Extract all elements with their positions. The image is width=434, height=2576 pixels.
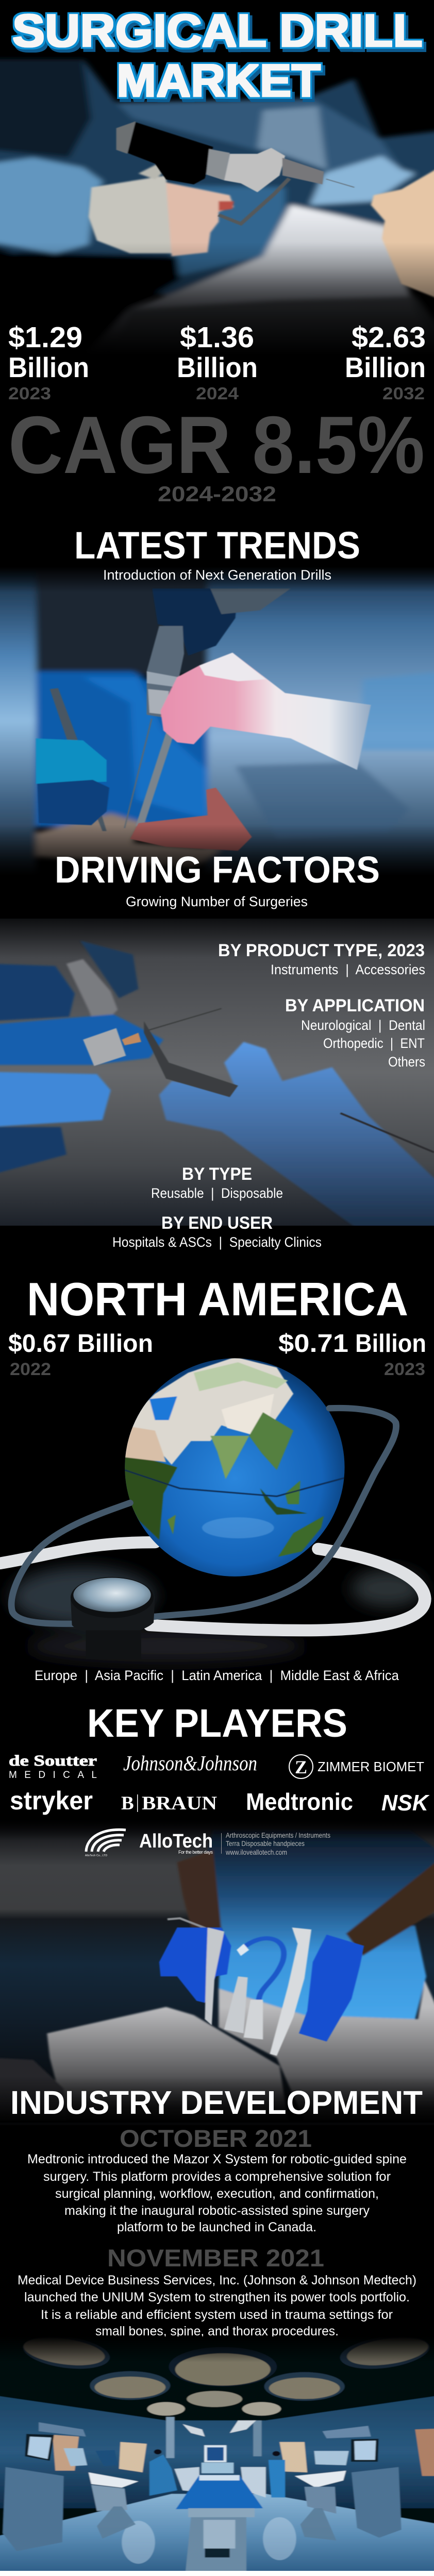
panel: operating room photo [0, 2331, 434, 2576]
logo: AlloTech: Arthroscopic Equipments / Instruments [226, 1831, 330, 1839]
stat 2032: $2.63 [352, 321, 426, 354]
logo: Stryker: stryker [10, 1786, 93, 1815]
paragraph: Medtronic: Medtronic introduced the Mazor X System for robotic-guided spine [27, 2152, 407, 2166]
panel: latest trends photo [0, 557, 434, 884]
paragraph: Johnson & Johnson: small bones, spine, and thorax procedures. [95, 2324, 339, 2338]
stat 2024 [177, 321, 258, 403]
paragraph: Johnson & Johnson [18, 2273, 416, 2338]
white tubing [0, 1543, 425, 1630]
segment: by product type: Instruments | Accessories [271, 962, 425, 977]
logo: de Soutter Medical: de Soutter [9, 1752, 97, 1769]
stat: 2023: Billion [355, 1330, 426, 1358]
segment: by application [285, 996, 425, 1070]
stat 2023: Billion [8, 351, 89, 383]
panel: market values [8, 321, 426, 490]
heading: latest trends: LATEST TRENDS [74, 524, 360, 567]
date: october 2021: OCTOBER 2021 [120, 2125, 312, 2152]
photo fade top [0, 567, 434, 592]
date: november 2021: NOVEMBER 2021 [107, 2244, 324, 2272]
stat 2023 [8, 321, 89, 403]
segment: by end user: BY END USER [161, 1213, 273, 1233]
logo: Zimmer Biomet [289, 1755, 424, 1778]
segment: by type: BY TYPE [182, 1164, 252, 1184]
logo: AlloTech: Terra Disposable handpieces [226, 1839, 305, 1848]
panel: industry development [10, 2084, 423, 2338]
logo: AlloTech: AlloTech [139, 1831, 213, 1852]
stat 2023: 2023 [8, 384, 51, 403]
logo: B. Braun: B [121, 1793, 134, 1814]
panel: segmentation [112, 941, 425, 1250]
stat 2024: $1.36 [180, 321, 254, 354]
logo: Zimmer Biomet: Z [295, 1757, 307, 1777]
paragraph: Johnson & Johnson: launched the UNIUM System to strengthen its power tools portfolio. [24, 2290, 410, 2304]
globe [122, 1357, 345, 1577]
segment: by type: Reusable | Disposable [151, 1185, 283, 1201]
title: Surgical Drill Market: SURGICAL DRILL [12, 5, 423, 56]
dark tubing [11, 1408, 396, 1624]
title: Surgical Drill Market: MARKET [116, 55, 321, 106]
panel: segmentation photo [0, 918, 434, 1230]
panel: footer [0, 2571, 434, 2576]
segment: by product type [218, 941, 425, 977]
logo: AlloTech: AlloTech Co., LTD [85, 1854, 107, 1857]
paragraph: Medtronic [27, 2152, 407, 2234]
logo: Zimmer Biomet: ZIMMER BIOMET [318, 1759, 424, 1774]
stat: 2022: 2022 [10, 1360, 51, 1379]
panel: hero [0, 5, 434, 359]
logo: Johnson & Johnson: Johnson&Johnson [123, 1751, 257, 1775]
photo fade top [0, 2336, 434, 2362]
paragraph: Johnson & Johnson: Medical Device Business Services, Inc. (Johnson & Johnson Medtech) [18, 2273, 416, 2287]
stat: 2022: $0.67 Billion [8, 1330, 153, 1358]
heading: driving factors: DRIVING FACTORS [55, 850, 380, 891]
segment: by application: BY APPLICATION [285, 996, 425, 1015]
logo: de Soutter Medical [9, 1752, 97, 1781]
segment: by type [151, 1164, 283, 1201]
stat: 2023: 2023 [384, 1360, 425, 1379]
stat 2032 [345, 321, 426, 403]
stat 2023: $1.29 [8, 321, 82, 354]
logo: de Soutter Medical: MEDICAL [9, 1770, 97, 1781]
stat 2024: 2024 [196, 384, 239, 403]
panel: north america [0, 1274, 426, 1662]
logo: NSK: NSK [381, 1790, 430, 1816]
sub-heading: driving factor text: Growing Number of Surgeries [126, 894, 308, 909]
stat: 2023 [278, 1330, 426, 1379]
segment: by product type: BY PRODUCT TYPE, 2023 [218, 941, 425, 960]
segment: by end user [112, 1213, 322, 1250]
paragraph: Medtronic: making it the inaugural robotic-assisted spine surgery [64, 2204, 370, 2218]
panel: key player logos [9, 1751, 430, 1857]
photo fade bottom [0, 2076, 434, 2123]
logo: Medtronic: Medtronic [246, 1788, 353, 1815]
photo fade bottom [0, 824, 434, 876]
logo: AlloTech: www.iloveallotech.com [225, 1848, 287, 1856]
stat: 2022 [8, 1330, 153, 1379]
title: Surgical Drill Market [12, 5, 423, 106]
photo: surgeon holding drill [0, 59, 434, 359]
sub-heading: latest trend text: Introduction of Next Generation Drills [103, 567, 331, 583]
logo: AlloTech [85, 1829, 330, 1857]
segment: by application: Others [388, 1054, 425, 1070]
heading: industry development: INDUSTRY DEVELOPMENT [10, 2084, 423, 2121]
stat 2032: 2032 [382, 384, 425, 403]
stat: 2023: $0.71 [278, 1330, 348, 1358]
paragraph: Medtronic: platform to be launched in Canada. [117, 2220, 316, 2234]
CAGR period: 2024-2032 [158, 482, 276, 506]
paragraph: Medtronic: surgery. This platform provides a comprehensive solution for [43, 2170, 391, 2184]
stat 2024: Billion [177, 351, 258, 383]
chest piece [71, 1577, 155, 1659]
region list: Europe | Asia Pacific | Latin America | Middle East & Africa [35, 1668, 399, 1683]
panel: key players photo [0, 1819, 434, 2125]
logo: AlloTech: For the better days [178, 1850, 213, 1855]
segment: by application: Neurological | Dental [301, 1018, 425, 1033]
segment: by end user: Hospitals & ASCs | Specialty Clinics [112, 1234, 322, 1250]
heading: key players: KEY PLAYERS [87, 1701, 347, 1745]
heading: north america: NORTH AMERICA [27, 1274, 408, 1326]
image: globe and stethoscope [0, 1357, 425, 1662]
photo fade [0, 242, 434, 355]
logo: B. Braun: BRAUN [142, 1793, 217, 1814]
stat 2032: Billion [345, 351, 426, 383]
paragraph: Johnson & Johnson: It is a reliable and efficient system used in trauma settings for [41, 2308, 393, 2322]
stethoscope reflections [11, 1567, 424, 1662]
photo fade top [0, 1819, 434, 1840]
paragraph: Medtronic: surgical planning, workflow, execution, and confirmation, [55, 2187, 379, 2201]
